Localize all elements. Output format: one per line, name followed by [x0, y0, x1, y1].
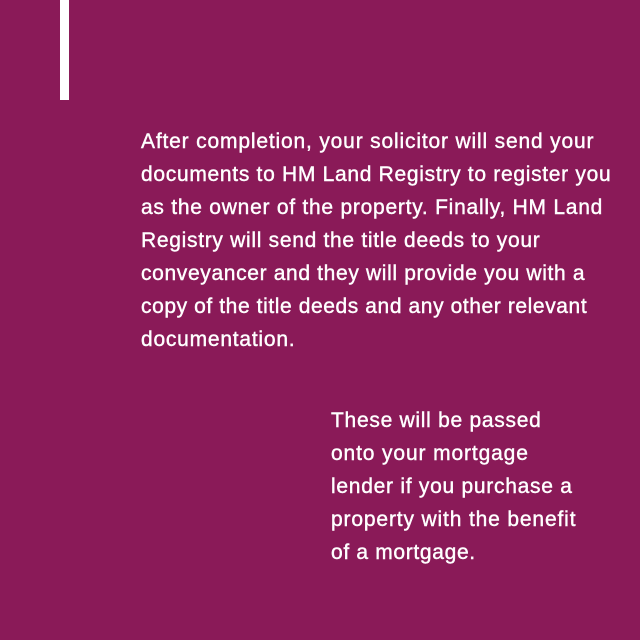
text block: mortgage lender note: lender if you purchase a [331, 475, 573, 498]
text block: mortgage lender note: property with the benefit [331, 508, 576, 531]
text block: completion and registration: copy of the title deeds and any other relevant [141, 295, 587, 318]
text block: completion and registration: conveyancer and they will provide you with a [141, 262, 585, 285]
text block: completion and registration: documentation. [141, 328, 295, 351]
text block: mortgage lender note: These will be passed [331, 409, 542, 432]
text block: mortgage lender note: onto your mortgage [331, 442, 529, 465]
text block: mortgage lender note [331, 409, 576, 564]
text block: mortgage lender note: of a mortgage. [331, 541, 476, 564]
text block: completion and registration: Registry will send the title deeds to your [141, 229, 540, 252]
text block: completion and registration: After completion, your solicitor will send your [141, 130, 594, 153]
text block: completion and registration: documents to HM Land Registry to register you [141, 163, 611, 186]
text block: completion and registration: as the owner of the property. Finally, HM Land [141, 196, 603, 219]
accent bar [60, 0, 69, 100]
text block: completion and registration [140, 130, 611, 351]
